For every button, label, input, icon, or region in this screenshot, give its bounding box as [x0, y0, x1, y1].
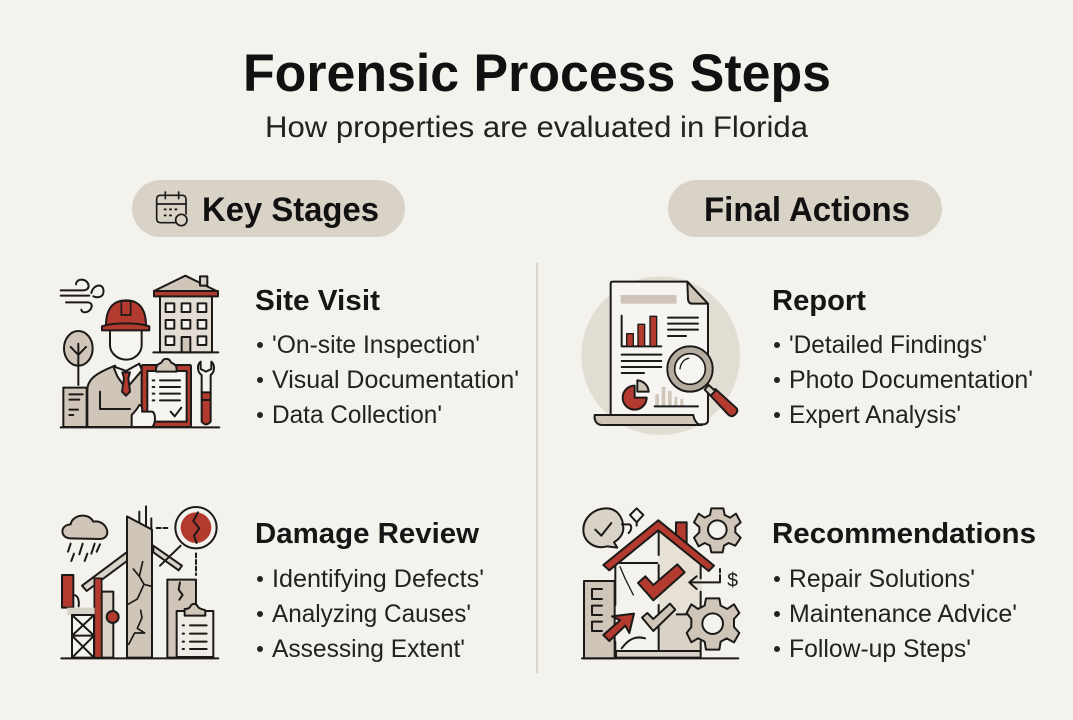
section pill: Final Actions [668, 180, 942, 237]
list: Site Visit: 'On-site Inspection' [272, 331, 480, 359]
list: Site Visit [257, 331, 519, 429]
icon: house with checkmarks and gears: $ [727, 570, 738, 591]
list: Recommendations [774, 565, 1017, 663]
list: Recommendations: Follow-up Steps' [789, 635, 971, 663]
icon: inspector with building and clipboard [61, 276, 219, 427]
list: Report: Expert Analysis' [789, 401, 961, 429]
heading: Damage Review: Damage Review [255, 518, 479, 550]
list: Damage Review: Assessing Extent' [272, 635, 465, 663]
section pill: Final Actions: Final Actions [704, 191, 910, 229]
section pill: Key Stages [132, 180, 405, 237]
center divider [536, 263, 538, 673]
icon: house with checkmarks and gears [582, 508, 741, 658]
list: Report [774, 331, 1033, 429]
heading: Report: Report [772, 285, 866, 317]
list: Damage Review: Analyzing Causes' [272, 600, 471, 628]
heading: Recommendations: Recommendations [772, 518, 1036, 550]
icon: report with magnifier [581, 276, 740, 435]
list: Recommendations: Maintenance Advice' [789, 600, 1017, 628]
icon: cracked building and rain cloud [61, 506, 218, 658]
gear top [694, 508, 741, 552]
list: Damage Review: Identifying Defects' [272, 565, 484, 593]
gear bottom [687, 598, 739, 650]
list: Report: 'Detailed Findings' [789, 331, 987, 359]
list: Recommendations: Repair Solutions' [789, 565, 975, 593]
list: Site Visit: Visual Documentation' [272, 366, 519, 394]
heading: Site Visit: Site Visit [255, 285, 380, 317]
list: Site Visit: Data Collection' [272, 401, 442, 429]
list: Report: Photo Documentation' [789, 366, 1033, 394]
icon: calendar [157, 192, 187, 226]
list: Damage Review [257, 565, 484, 663]
section pill: Key Stages: Key Stages [202, 191, 379, 229]
title: Forensic Process Steps [243, 44, 831, 103]
subtitle: How properties are evaluated in Florida [265, 111, 808, 144]
